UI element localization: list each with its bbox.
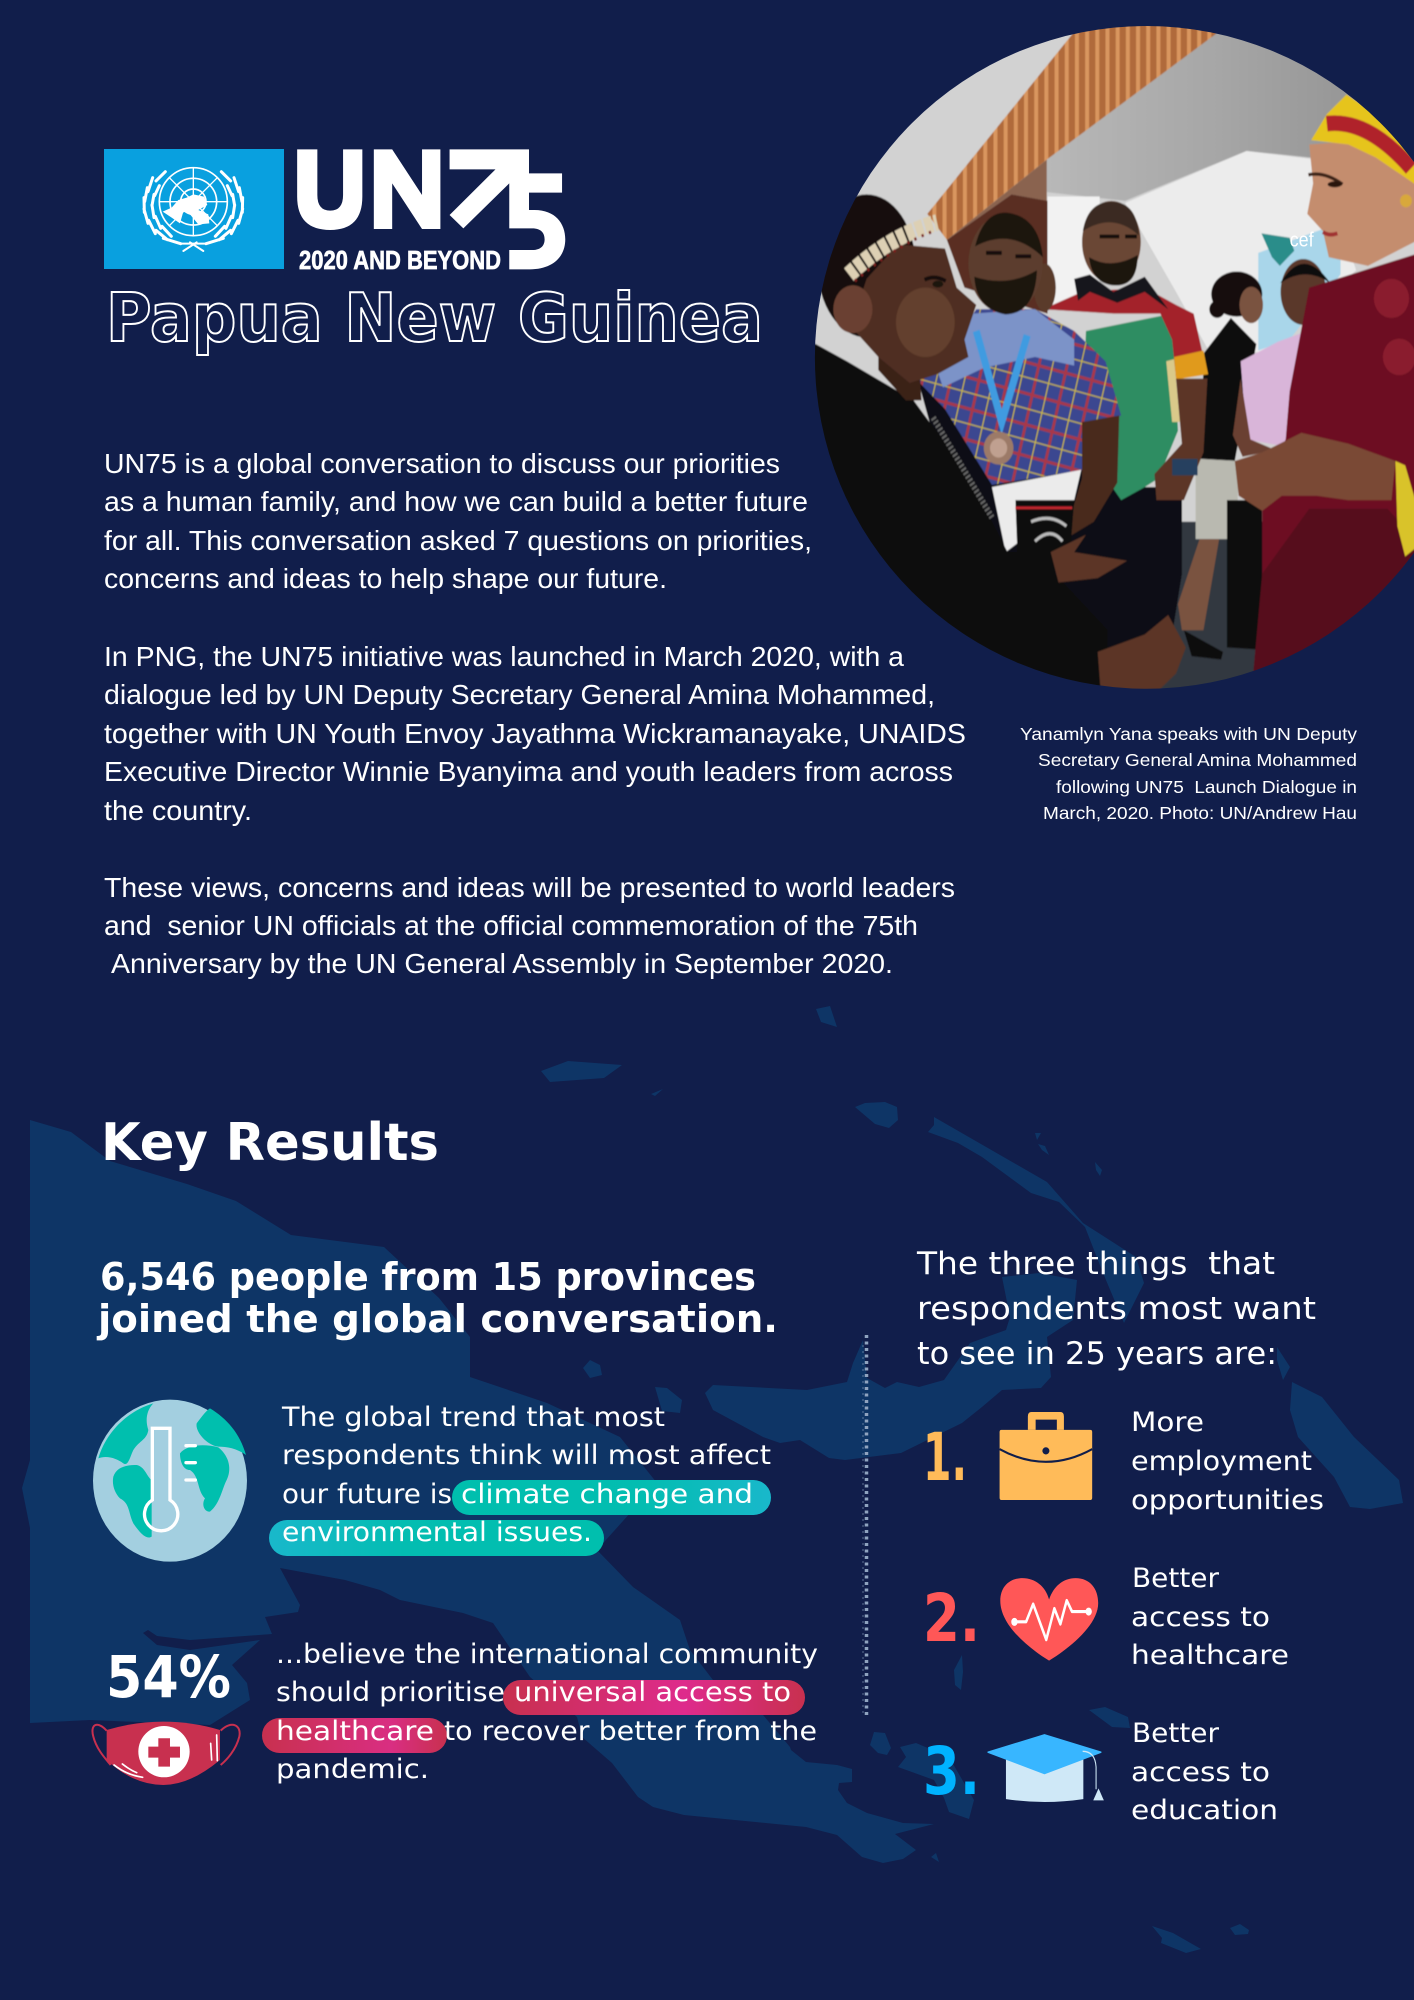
intro paragraph 2: together with UN Youth Envoy Jayathma Wickramanayake, UNAIDS <box>104 718 966 749</box>
text block: international community: pandemic. <box>276 1754 429 1785</box>
intro paragraph 2: dialogue led by UN Deputy Secretary General Amina Mohammed, <box>104 679 935 710</box>
number 2: 2. <box>923 1580 980 1657</box>
text block: climate trend: environmental issues. <box>282 1517 592 1548</box>
intro paragraph 3: Anniversary by the UN General Assembly in September 2020. <box>111 948 893 979</box>
label: education: education <box>1131 1795 1278 1826</box>
UN flag emblem <box>104 149 284 269</box>
photo caption: following UN75 Launch Dialogue in <box>1056 777 1357 797</box>
heading: three things: respondents most want <box>917 1291 1316 1327</box>
logo tagline: 2020 AND BEYOND <box>299 245 501 275</box>
emblem background <box>104 149 284 269</box>
text block: international community: to recover better from the <box>444 1716 817 1747</box>
highlight pills: healthcare <box>262 1680 805 1753</box>
text block: climate trend: The global trend that most <box>281 1402 665 1433</box>
number 3: 3. <box>923 1733 980 1810</box>
label: education <box>1131 1718 1278 1826</box>
number 1: 1. <box>923 1419 967 1496</box>
man in green shirt <box>1043 201 1208 635</box>
intro paragraph 2: the country. <box>104 795 252 826</box>
photo: UN Deputy Secretary General speaking with youth leaders <box>800 10 1414 704</box>
emblem globe <box>159 167 228 236</box>
icon: graduation cap <box>988 1735 1104 1802</box>
woman in black, background <box>1178 272 1263 660</box>
intro paragraph 2: Executive Director Winnie Byanyima and youth leaders from across <box>104 756 953 787</box>
text block: international community: ...believe the international community <box>276 1639 818 1670</box>
UN75 logo wordmark <box>297 149 565 275</box>
background map of Papua New Guinea <box>22 1006 1403 1953</box>
map: New Britain <box>705 1273 1077 1460</box>
heading: three things <box>916 1246 1316 1372</box>
photo caption: March, 2020. Photo: UN/Andrew Hau <box>1043 803 1357 823</box>
photo caption: Yanamlyn Yana speaks with UN Deputy <box>1020 724 1357 744</box>
headline statistic: joined the global conversation. <box>96 1297 778 1341</box>
text block: international community <box>262 1639 818 1785</box>
item 1: employment <box>923 1407 1324 1516</box>
label: education: access to <box>1131 1757 1270 1788</box>
label: healthcare: Better <box>1132 1563 1220 1594</box>
intro paragraph 3: These views, concerns and ideas will be presented to world leaders <box>104 872 955 903</box>
label: employment <box>1131 1407 1324 1516</box>
logo letters U N 7 5 <box>297 149 565 269</box>
highlight pills: climate <box>269 1480 771 1556</box>
icon: globe with thermometer <box>93 1400 247 1562</box>
dark clothing behind the group <box>920 382 1181 649</box>
photo detail: poster lettering: cef <box>1290 230 1314 252</box>
photo caption <box>1020 724 1357 823</box>
heading: Key Results: Key Results <box>101 1113 439 1173</box>
text block: international community: healthcare <box>276 1716 434 1747</box>
icon: heart with pulse <box>1000 1578 1098 1661</box>
label: employment: opportunities <box>1131 1485 1324 1516</box>
text block: climate trend: respondents think will most affect <box>282 1440 771 1471</box>
title: Papua New Guinea: Papua New Guinea <box>106 279 763 357</box>
emblem wreath <box>144 172 243 251</box>
text block: climate trend: our future is <box>282 1479 452 1510</box>
text block: climate trend <box>269 1402 771 1556</box>
map: smaller islands <box>541 1006 1290 1953</box>
intro paragraph 2 <box>104 641 966 826</box>
item 3: education <box>923 1718 1278 1826</box>
man behind <box>1034 264 1056 311</box>
intro paragraph 3: and senior UN officials at the official commemoration of the 75th <box>104 910 918 941</box>
woman with shell headband, foreground <box>800 194 1186 704</box>
woman in pink, background <box>1227 259 1330 650</box>
headline statistic: 6,546 people from 15 provinces <box>100 1255 756 1299</box>
statistic: 54%: 54% <box>106 1643 231 1711</box>
text block: climate trend: climate change and <box>461 1479 753 1510</box>
headline statistic <box>96 1255 778 1341</box>
label: employment: employment <box>1131 1446 1312 1477</box>
photo caption: Secretary General Amina Mohammed <box>1038 750 1357 770</box>
item 2: healthcare <box>923 1563 1289 1671</box>
intro paragraph 3 <box>104 872 955 979</box>
map: New Ireland <box>928 1117 1144 1323</box>
intro paragraph 1: as a human family, and how we can build a better future <box>104 486 808 517</box>
icon: briefcase <box>1000 1412 1092 1500</box>
text block: international community: should prioritise <box>276 1677 505 1708</box>
heading: three things: The three things that <box>916 1246 1275 1282</box>
label: education: Better <box>1132 1718 1220 1749</box>
intro paragraph 1: concerns and ideas to help shape our future. <box>104 563 667 594</box>
Amina Mohammed in maroon dress <box>1235 95 1414 704</box>
label: healthcare: access to <box>1131 1602 1270 1633</box>
intro paragraph 1: UN75 is a global conversation to discuss our priorities <box>104 448 780 479</box>
intro paragraph 1: for all. This conversation asked 7 questions on priorities, <box>104 525 812 556</box>
intro paragraph 1 <box>104 448 812 594</box>
heading: three things: to see in 25 years are: <box>917 1336 1277 1372</box>
label: employment: More <box>1131 1407 1204 1438</box>
intro paragraph 2: In PNG, the UN75 initiative was launched in March 2020, with a <box>104 641 905 672</box>
man in plaid shirt <box>916 213 1121 552</box>
icon: face mask with cross <box>92 1722 240 1785</box>
map: Bougainville <box>1290 1382 1403 1509</box>
label: healthcare <box>1131 1563 1289 1671</box>
map: mainland <box>22 1120 934 1863</box>
label: healthcare: healthcare <box>1131 1640 1289 1671</box>
text block: international community: universal access to <box>514 1677 791 1708</box>
emblem artwork <box>144 167 243 251</box>
